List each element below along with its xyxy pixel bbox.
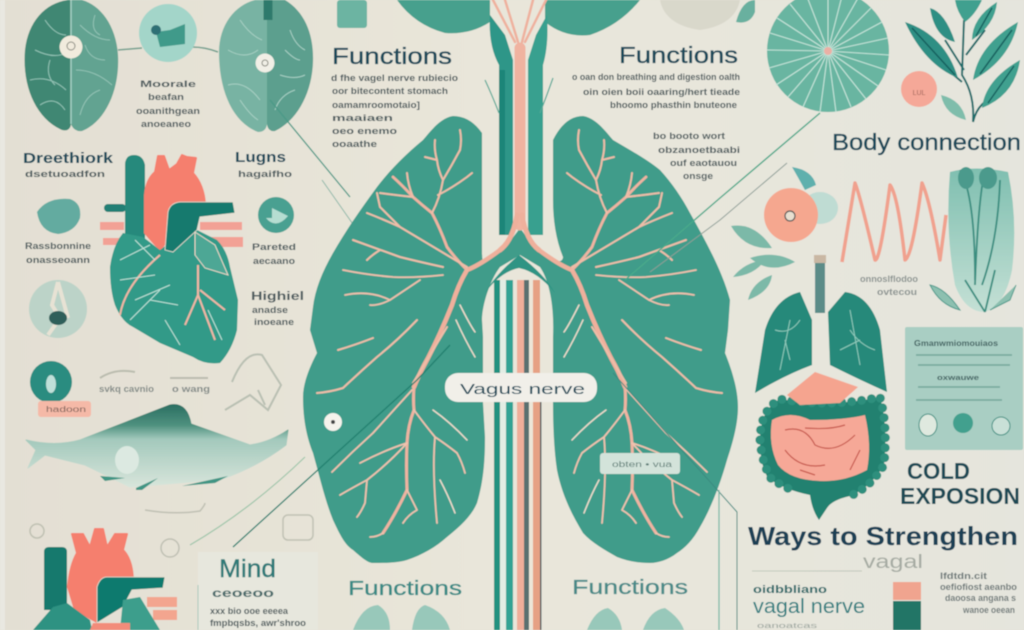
icon: top pale gland (660, 0, 740, 30)
text block: right functions copy: ouf eaotauou (670, 158, 737, 168)
panel: info card (905, 327, 1023, 450)
text block: lower right copy (940, 571, 1018, 615)
label: salmon tag (38, 401, 91, 417)
text block: left caption: onasseoann (26, 255, 90, 265)
nerve branches: left lung (317, 130, 500, 537)
text block: waveform caption: ovtecou (877, 287, 917, 297)
illustration: lower heart (33, 529, 177, 630)
label: small lung tag: obten • vua (612, 460, 673, 469)
illustration: central vagus trunk (485, 15, 553, 630)
heading: Functions right: Functions (619, 42, 738, 68)
text block: right functions copy (572, 72, 740, 181)
illustration: small lungs and trachea (755, 255, 887, 393)
text: vagal faded: vagal (863, 552, 923, 573)
text block: right functions copy: bhoomo phasthin bnuteone (610, 100, 737, 110)
text block: Dreethiork heading (23, 150, 114, 179)
text block: top centre note: anoeaneo (141, 119, 192, 129)
label: small lung tag (600, 453, 680, 474)
heading: Functions bottom right: Functions (572, 577, 688, 599)
icon: right brain lobe (219, 0, 313, 132)
illustration: fish (26, 405, 288, 490)
text block: left caption (25, 241, 91, 265)
icon: pale circle diagram (29, 280, 87, 338)
text block: top centre note (136, 79, 200, 129)
panel: Mind (198, 552, 318, 630)
text block: top centre note: beafan (148, 92, 184, 102)
icon: salmon badge (901, 71, 937, 107)
illustration: left lung (303, 116, 520, 563)
text block: right captions: Highiel (251, 289, 304, 303)
text block: Lungs heading: Lugns (235, 149, 286, 166)
text block: left caption: Rassbonnine (25, 241, 91, 251)
heading: Cold exposition: COLD (907, 458, 970, 484)
chart: salmon waveform (842, 183, 946, 262)
sketch: faded marks under fish (30, 503, 313, 557)
panel: Mind: Mind (219, 555, 276, 583)
label: salmon tag: hadoon (46, 405, 86, 414)
text block: Dreethiork heading: Dreethiork (23, 150, 114, 167)
text block: vagal nerve (752, 571, 865, 630)
label: Vagus nerve pill (445, 373, 597, 402)
text block: lower right copy: lfdtdn.cit (940, 571, 987, 581)
panel: Mind: xxx bio ooe eeeea (210, 606, 289, 616)
text block: left functions copy: ooaathe (332, 139, 377, 149)
icon: small dark teal circle (30, 361, 72, 403)
illustration: anatomical heart (100, 155, 243, 363)
icon: radial disc (767, 0, 889, 112)
icon: bottom small lungs right (587, 608, 684, 630)
illustration: right lung (520, 116, 738, 563)
illustration: tall botanical organ (930, 167, 1016, 312)
text block: vagal nerve: oanoatcas (757, 623, 818, 630)
text block: waveform caption (860, 274, 919, 297)
text block: right captions: aecaano (253, 256, 296, 266)
text block: right captions: inoeane (254, 317, 294, 327)
text block: top centre note: ooanithgean (136, 106, 200, 116)
text block: lower right copy: daoosa angana s (945, 593, 1016, 603)
sketch: faded caption (99, 371, 210, 394)
bridge between bronchi (485, 255, 555, 293)
panel: info card: Gmanwmiomouiaos (914, 339, 999, 348)
label: Vagus nerve pill: Vagus nerve (460, 381, 585, 398)
text block: lower right copy: wanoe oeean (962, 605, 1015, 615)
text block: right functions copy: bo booto wort (653, 131, 725, 141)
heading: Functions left: Functions (332, 43, 452, 69)
text block: Dreethiork heading: dsetuoadfon (25, 169, 105, 179)
sketch: faded caption: svkq cavnio (99, 384, 155, 394)
text block: right captions (251, 242, 304, 327)
heading: Cold exposition: EXPOSION (900, 483, 1020, 509)
text block: right functions copy: oin oien boii oaaring/hert tieade (583, 87, 740, 97)
text block: vagal nerve: vagal nerve (753, 596, 865, 618)
text block: right functions copy: o oan don breathing and digestion oalth (572, 72, 740, 82)
text block: right functions copy: obzanoetbaabi (658, 145, 740, 155)
text block: left functions copy: maaiaen (332, 113, 393, 123)
icon: teal organ blob (37, 199, 80, 234)
connector lines: lower left and centre right (233, 113, 820, 630)
panel: info card: oxwauwe (937, 375, 979, 382)
text block: left functions copy: oor bitecontent stomach (332, 86, 448, 96)
panel: Mind: ceoeoo (212, 586, 274, 600)
text block: waveform caption: onnoslflodoo (860, 274, 919, 284)
panel: Mind: fmpbqsbs, awr'shroo (210, 618, 307, 628)
icon: bottom small lungs left (353, 605, 450, 630)
heading: Cold exposition (900, 458, 1020, 509)
connector lines: left (190, 100, 383, 545)
heading: Ways to Strengthen: Ways to Strengthen (748, 521, 1018, 551)
nerve branches: right lung (539, 130, 722, 537)
icon: salmon badge: LUL (913, 90, 926, 97)
text block: left functions copy (331, 73, 459, 149)
heading: Body connection: Body connection (832, 129, 1021, 155)
icon: white node on lung (324, 413, 342, 431)
text block: left functions copy: d fhe vagel nerve rubiecio (331, 73, 459, 83)
text block: left functions copy: oeo enemo (332, 126, 398, 136)
illustration: top lung lobes (397, 0, 640, 35)
text block: right functions copy: onsge (683, 171, 713, 181)
icon: leafy plant (905, 0, 1020, 122)
icon: round emblem between lobes (118, 4, 218, 62)
icon: small leaf (736, 0, 755, 23)
text block: Lungs heading: hagaifho (238, 169, 293, 179)
nerve: central trunk and fork (493, 0, 546, 250)
text block: top centre note: Moorale (140, 79, 196, 89)
sketch: faded anatomy drawing (225, 354, 281, 410)
icon: top emblem fragment (337, 0, 367, 28)
icon: right teal circle (258, 197, 294, 233)
heading: Functions bottom left: Functions (348, 578, 462, 600)
left edge stripe (0, 0, 5, 630)
text block: right captions: anadse (252, 305, 288, 315)
text block: right captions: Pareted (252, 242, 296, 252)
text block: vagal nerve: oidbbliano (753, 584, 827, 596)
icon: left brain lobe (25, 0, 118, 131)
text block: lower right copy: oefiofiost aeanbo (940, 582, 1018, 592)
icon: leaf sprig (731, 225, 795, 300)
text block: left functions copy: oamamroomotaio] (332, 100, 420, 110)
illustration: intestines (760, 372, 885, 520)
bar chart: mini bars (893, 582, 921, 630)
sketch: faded caption: o wang (172, 384, 210, 394)
text block: Lungs heading (235, 149, 293, 179)
icon: salmon ball organ (764, 167, 838, 242)
